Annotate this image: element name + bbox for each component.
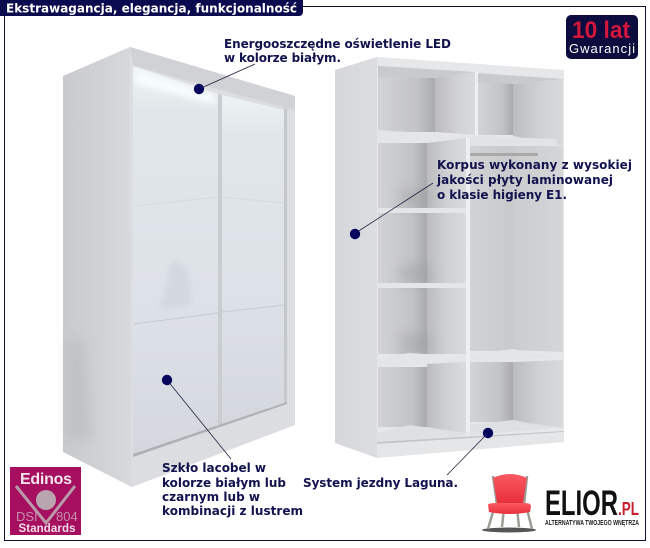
title banner: Ekstrawagancja, elegancja, funkcjonalność <box>6 2 297 16</box>
open wardrobe interior <box>335 57 564 458</box>
logo: Elior.pl: ELIOR <box>545 484 618 523</box>
logo: Edinos DSI 804 Standards: Standards <box>18 523 76 535</box>
wardrobe glass door right <box>222 95 284 424</box>
wardrobe glass door left <box>133 66 218 456</box>
open wardrobe side panel <box>335 57 377 458</box>
sliding track plinth <box>377 431 564 444</box>
wardrobe with glass sliding doors <box>63 47 295 487</box>
callout: LED lighting: w kolorze białym. <box>224 51 341 65</box>
top shelf left <box>377 130 467 143</box>
bottom shelf left <box>377 425 466 442</box>
callout: sliding system: System jezdny Laguna. <box>303 476 458 490</box>
logo: Edinos DSI 804 Standards <box>10 467 81 535</box>
callout: sliding system <box>303 428 493 490</box>
wardrobe side panel <box>63 47 132 487</box>
callout: LED lighting: Energooszczędne oświetlenie LED <box>224 37 451 51</box>
logo: Edinos DSI 804 Standards: DSI <box>16 509 38 524</box>
right column back <box>470 146 513 351</box>
door panel seams <box>134 305 284 324</box>
upper right compartment <box>478 73 563 146</box>
callout: glass: Szkło lacobel w <box>162 461 266 475</box>
center door rail <box>218 94 222 427</box>
bottom shelf right <box>470 420 556 435</box>
lower right compartment <box>470 360 563 428</box>
upper left compartment <box>378 66 475 135</box>
upper vertical divider <box>475 72 478 136</box>
callout: glass: kolorze białym lub <box>162 476 286 490</box>
logo: Edinos DSI 804 Standards: 804 <box>56 509 78 524</box>
callout: carcass <box>350 158 632 239</box>
wardrobe front frame <box>130 47 295 487</box>
hanging rail <box>470 153 538 156</box>
open wardrobe front carcass <box>377 57 564 458</box>
shelf 1 <box>377 208 466 213</box>
right column shelf <box>470 349 556 362</box>
callout: glass: kombinacji z lustrem <box>162 504 303 518</box>
badge: 10 years warranty: 10 lat <box>572 17 630 44</box>
badge: 10 years warranty <box>566 15 638 59</box>
shelf shadows <box>400 190 430 353</box>
shelf 2 <box>377 283 466 288</box>
icon: red chair <box>482 474 536 532</box>
top shelf right <box>467 136 557 147</box>
vertical divider <box>466 137 470 432</box>
lower side shadow <box>68 340 92 440</box>
callout: carcass: Korpus wykonany z wysokiej <box>437 158 632 172</box>
callout: glass: czarnym lub w <box>162 490 260 504</box>
right door rail <box>284 108 287 403</box>
LED glow <box>136 70 215 105</box>
door reflection <box>160 260 192 310</box>
callout: LED lighting <box>194 37 451 94</box>
callout: glass <box>162 375 303 518</box>
right column side <box>513 146 563 352</box>
top band <box>130 47 295 110</box>
logo: Edinos DSI 804 Standards: Edinos <box>20 471 72 488</box>
shelf 3 <box>377 353 466 367</box>
left column back <box>378 143 427 354</box>
logo: Elior.pl: .PL <box>618 499 639 519</box>
callout: carcass: o klasie higieny E1. <box>437 188 567 202</box>
bottom rail <box>133 402 287 457</box>
left column side <box>427 138 466 354</box>
lower left compartment <box>378 362 466 434</box>
callout: carcass: jakości płyty laminowanej <box>436 173 613 187</box>
badge: 10 years warranty: Gwarancji <box>569 41 635 56</box>
